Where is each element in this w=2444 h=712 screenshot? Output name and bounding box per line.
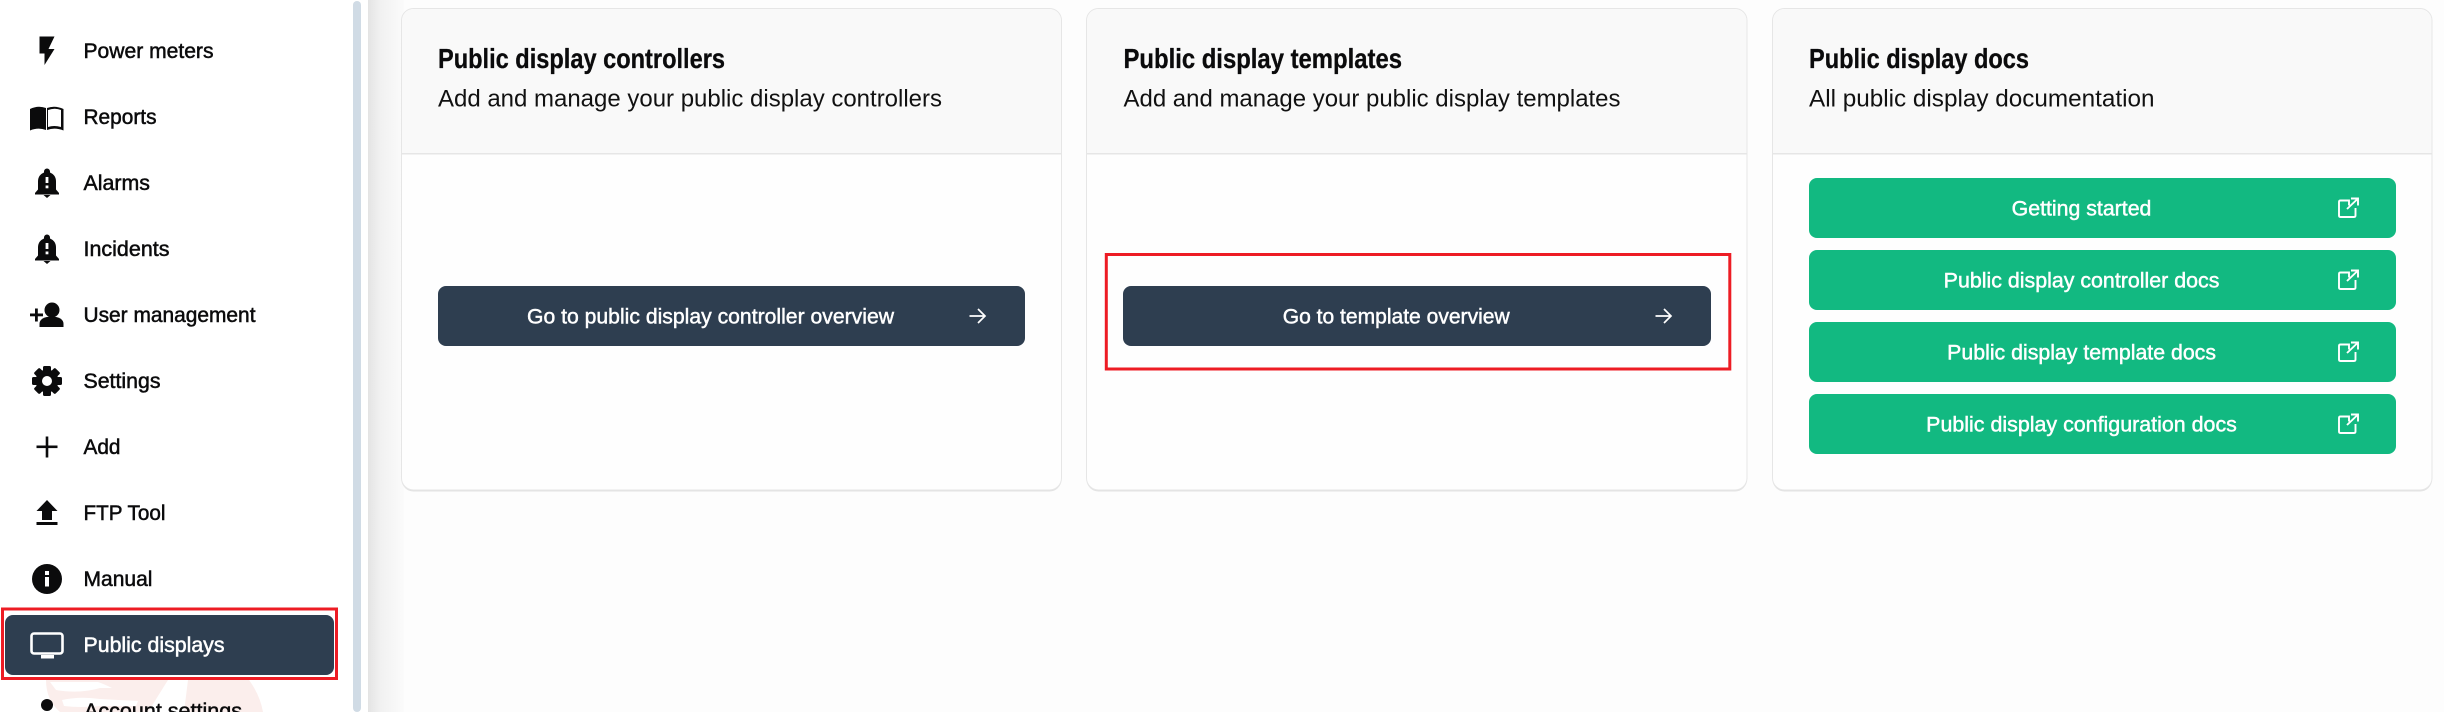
sidebar watermark logo (46, 680, 263, 712)
button: Public display configuration docs (1809, 394, 2396, 454)
subtitle: Add and manage your public display controllers (438, 86, 942, 112)
highlight box: template overview button (1106, 254, 1730, 369)
button: Public display configuration docs: Public display configuration docs (1926, 414, 2237, 436)
panel: Public display controllers (402, 8, 1062, 492)
nav item: Incidents: Incidents (84, 238, 170, 261)
nav item: Public displays (active): Public displays (84, 634, 224, 657)
sidebar navigation (5, 36, 334, 712)
nav item: User management: User management (84, 304, 256, 327)
subtitle: All public display documentation (1809, 86, 2154, 112)
nav item: Public displays (active) (5, 615, 334, 675)
heading: Public display templates (1124, 43, 1402, 74)
nav item: Settings: Settings (84, 370, 160, 393)
nav item: Power meters: Power meters (84, 40, 214, 63)
heading: Public display docs (1809, 43, 2029, 74)
nav item: FTP Tool (36, 500, 166, 525)
nav item: Manual: Manual (84, 568, 152, 591)
button: Getting started: Getting started (2012, 198, 2151, 220)
card header (1773, 9, 2432, 153)
button: Getting started (1809, 178, 2396, 238)
sidebar scrollbar (353, 1, 361, 712)
button: Public display template docs (1809, 322, 2396, 382)
button: Public display controller docs (1809, 250, 2396, 310)
nav item: Alarms: Alarms (84, 172, 150, 195)
button: go to controller overview (438, 286, 1025, 346)
nav item: Alarms (35, 168, 150, 198)
nav item: Add: Add (84, 436, 120, 459)
nav item: Manual (32, 564, 152, 594)
card header (402, 9, 1061, 153)
panel: Public display docs (1772, 8, 2432, 492)
nav item: Power meters (40, 36, 214, 65)
nav item: Reports (30, 106, 156, 130)
nav item: Reports: Reports (84, 106, 156, 129)
button: go to template overview: Go to template overview (1283, 306, 1511, 328)
nav item: Incidents (35, 234, 170, 264)
button: go to template overview (1123, 286, 1711, 346)
highlight box: Public displays (2, 609, 336, 678)
button: go to controller overview: Go to public display controller overview (527, 306, 895, 328)
button: Public display template docs: Public display template docs (1947, 342, 2216, 364)
button: Public display controller docs: Public display controller docs (1944, 270, 2219, 292)
subtitle: Add and manage your public display templates (1124, 86, 1620, 112)
nav item: Add (36, 436, 120, 459)
panel: Public display templates (1086, 8, 1747, 492)
heading: Public display controllers (438, 43, 725, 74)
nav item: Settings (32, 366, 160, 396)
nav item: FTP Tool: FTP Tool (84, 502, 166, 525)
card header (1087, 9, 1746, 153)
